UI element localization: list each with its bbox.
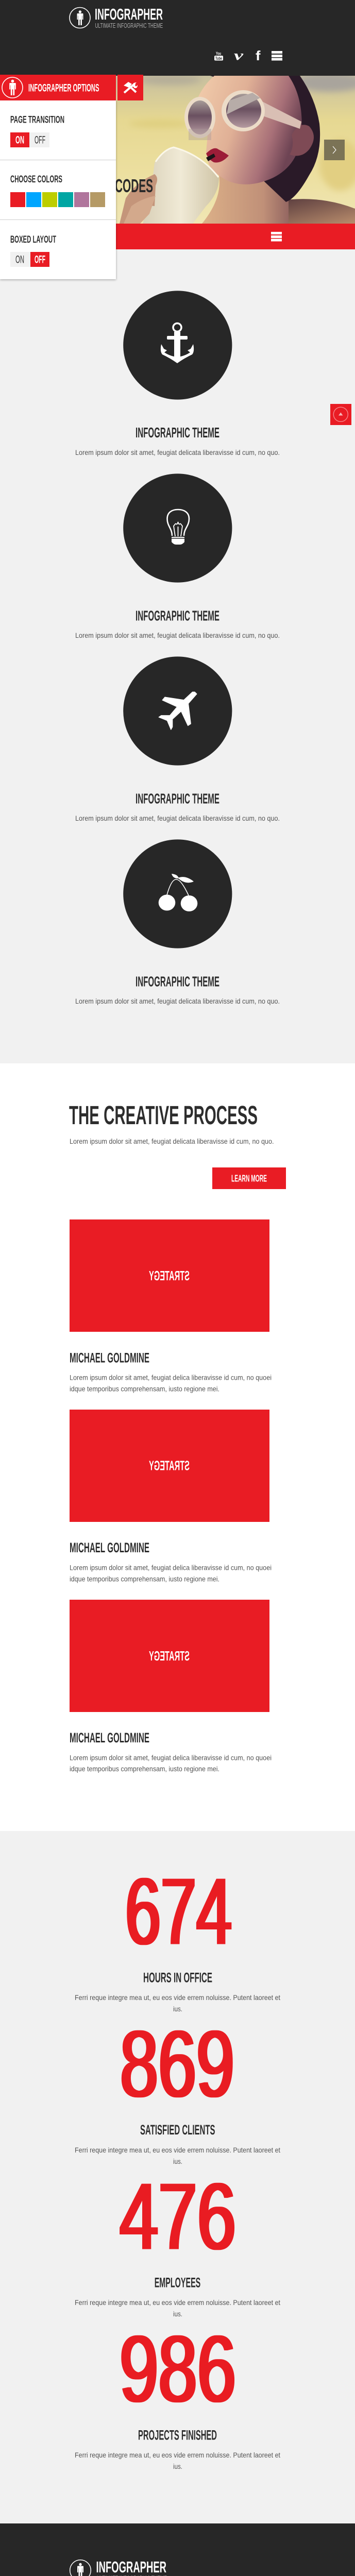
slider next arrow [324,140,345,160]
text: Lorem ipsum dolor sit amet, feugiat delicata liberavisse id cum, no quo. [75,631,280,639]
logo [70,6,163,29]
header social icons [214,48,282,63]
card 3: STRATEGY [149,1648,190,1664]
footer logo [70,2558,167,2576]
feature: light bulb [75,473,280,639]
card 1 [70,1219,272,1393]
card 3 [70,1600,272,1773]
text: Lorem ipsum dolor sit amet, feugiat delicata liberavisse id cum, no quo. [75,448,280,456]
card 1: MICHAEL GOLDMINE [70,1350,149,1365]
boxed layout: OFF [35,253,45,266]
hero photo: woman in sunglasses with cup [116,76,355,224]
slider caption: CODES [115,175,153,196]
icon: bulb [167,510,189,545]
card 3: MICHAEL GOLDMINE [70,1730,149,1745]
stat: projects finished [75,2316,280,2470]
hair [210,76,320,202]
stat: satisfied clients [75,2011,280,2165]
feature: cherries [75,839,280,1005]
feature: plane [75,656,280,822]
stat: employees [75,2163,280,2318]
stat: projects finished: 986 [120,2316,236,2421]
options header [0,75,116,100]
page transition [10,114,64,147]
icon: anchor [161,324,194,363]
card 1: Lorem ipsum dolor sit amet, feugiat delica liberavisse id cum, no quoei [70,1374,272,1382]
stat: hours in office [75,1858,280,2013]
stat: employees: 476 [120,2163,236,2269]
choose colors [10,174,105,207]
card 3: Lorem ipsum dolor sit amet, feugiat delica liberavisse id cum, no quoei [70,1753,272,1761]
options header: INFOGRAPHER OPTIONS [28,82,99,94]
stat: hours in office: ius. [173,2005,182,2013]
icon: plane [159,692,197,730]
panel: infographer options [0,75,143,279]
stat: satisfied clients: 869 [120,2011,234,2116]
choose colors: CHOOSE COLORS [10,174,62,185]
boxed layout: BOXED LAYOUT [10,234,56,245]
face [198,76,302,184]
stat: hours in office: HOURS IN OFFICE [143,1970,212,1986]
card 2: MICHAEL GOLDMINE [70,1540,149,1555]
stat: projects finished: ius. [173,2462,182,2470]
stat: satisfied clients: Ferri reque integre mea ut, eu eos vide errem noluisse. Putent laoreet et [75,2146,280,2154]
icon: cherries [159,874,197,911]
button: learn more [212,1167,286,1189]
back to top button [330,404,351,425]
card 1: STRATEGY [149,1268,190,1283]
stat: projects finished: PROJECTS FINISHED [138,2427,217,2443]
panel: creative process [0,1063,355,1831]
stat: employees: EMPLOYEES [155,2275,200,2290]
neck [202,175,289,224]
button: learn more: LEARN MORE [231,1174,267,1184]
stat: employees: Ferri reque integre mea ut, eu eos vide errem noluisse. Putent laoreet et [75,2298,280,2307]
tools button [117,75,143,100]
shoulder [289,199,355,224]
header social icons: You [216,52,221,56]
text: Lorem ipsum dolor sit amet, feugiat delicata liberavisse id cum, no quo. [75,997,280,1005]
stat: projects finished: Ferri reque integre mea ut, eu eos vide errem noluisse. Putent laoreet et [75,2451,280,2459]
card 1: idque temporibus comprehensam, iusto regione mei. [70,1384,219,1393]
header social icons: f [256,48,261,63]
stat: satisfied clients: ius. [173,2157,182,2165]
stat: hours in office: Ferri reque integre mea ut, eu eos vide errem noluisse. Putent laoreet et [75,1993,280,2002]
header social icons: v [234,48,244,63]
cup [143,147,219,224]
heading: INFOGRAPHIC THEME [136,607,219,623]
menu icon [271,232,282,241]
text: Lorem ipsum dolor sit amet, feugiat delicata liberavisse id cum, no quo. [75,814,280,822]
heading: INFOGRAPHIC THEME [136,425,219,440]
logo: ULTIMATE INFOGRAPHIC THEME [95,22,163,29]
card 2: Lorem ipsum dolor sit amet, feugiat delica liberavisse id cum, no quoei [70,1563,272,1571]
boxed layout: ON [15,253,24,266]
logo: INFOGRAPHER [95,6,163,23]
stat: employees: ius. [173,2310,182,2318]
card 2: idque temporibus comprehensam, iusto regione mei. [70,1574,219,1583]
heading: INFOGRAPHIC THEME [136,790,219,806]
stat: satisfied clients: SATISFIED CLIENTS [140,2122,215,2138]
card 2: STRATEGY [149,1458,190,1473]
intro: Lorem ipsum dolor sit amet, feugiat delicata liberavisse id cum, no quo. [70,1137,274,1145]
boxed layout [10,234,56,267]
glasses [184,90,301,140]
card 3: idque temporibus comprehensam, iusto regione mei. [70,1765,219,1773]
red navigation bar [0,224,355,249]
page transition: PAGE TRANSITION [10,114,64,126]
page transition: ON [15,134,24,146]
heading: INFOGRAPHIC THEME [136,973,219,989]
footer logo: INFOGRAPHER [96,2558,166,2576]
header social icons: Tube [215,56,222,61]
header bar [0,0,355,76]
stat: hours in office: 674 [125,1858,232,1964]
lips [206,148,229,162]
panel: footer [0,2523,355,2576]
page transition: OFF [35,134,45,146]
hand [120,174,157,224]
card 2 [70,1410,272,1583]
ear [290,125,314,156]
feature: anchor [75,291,280,456]
